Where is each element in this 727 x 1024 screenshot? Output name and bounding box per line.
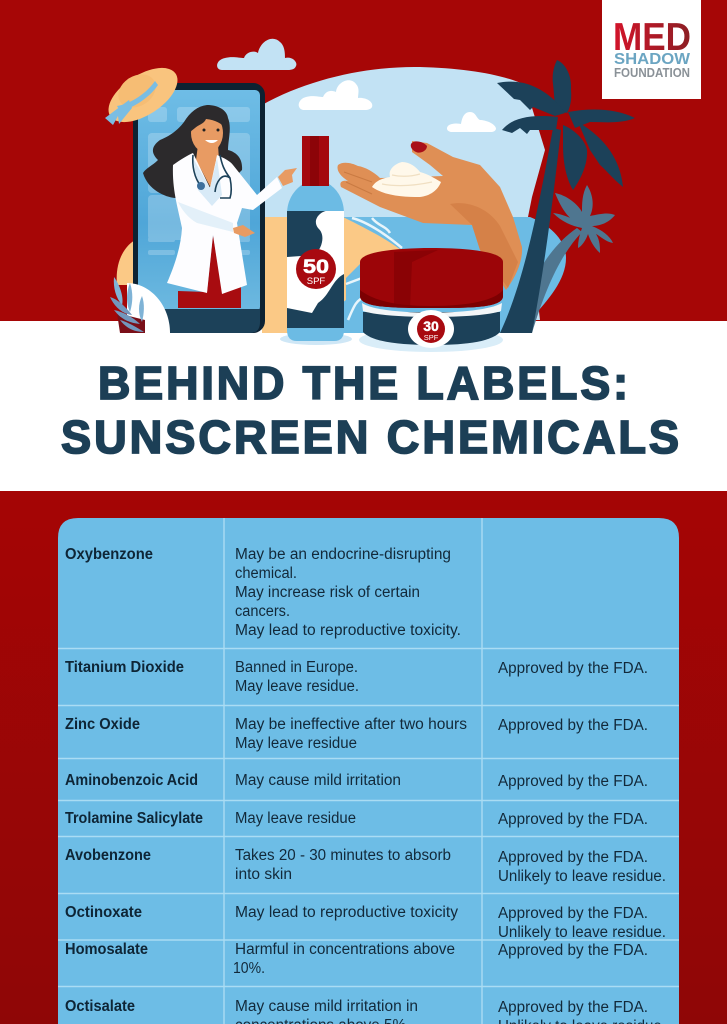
row: Trolamine Salicylate: Trolamine Salicylate (65, 810, 203, 827)
lower red background (0, 491, 727, 1024)
row: Oxybenzone: May lead to reproductive toxicity. (235, 622, 461, 639)
row: Avobenzone (65, 847, 666, 885)
stethoscope (193, 155, 231, 198)
cream dollop (372, 162, 441, 197)
logo: MedShadow Foundation: FOUNDATION (614, 66, 690, 80)
row: Titanium Dioxide: May leave residue. (235, 678, 359, 695)
row: Octisalate: Octisalate (65, 998, 135, 1015)
row: Homosalate (65, 941, 648, 977)
cream jar (359, 248, 503, 352)
sand (262, 217, 401, 333)
row: Titanium Dioxide: Approved by the FDA. (498, 660, 648, 677)
row: Octinoxate: Octinoxate (65, 904, 142, 921)
beach illustration (99, 39, 635, 352)
row: Octinoxate: May lead to reproductive toxicity (235, 904, 458, 921)
badge: 50 SPF: SPF (307, 276, 325, 287)
foam on shore (346, 218, 402, 320)
row: Homosalate: Harmful in concentrations above (235, 941, 455, 958)
doctor hair (143, 105, 242, 198)
row: Oxybenzone: Oxybenzone (65, 546, 153, 563)
row: Homosalate: Homosalate (65, 941, 148, 958)
jar label: 30 SPF (408, 310, 454, 348)
cloud: right (447, 112, 496, 132)
logo: MedShadow Foundation (602, 0, 701, 99)
row: Oxybenzone: May be an endocrine-disrupting (235, 546, 451, 563)
row: Oxybenzone (65, 546, 461, 639)
row: Zinc Oxide: Approved by the FDA. (498, 717, 648, 734)
row: Titanium Dioxide (65, 659, 648, 695)
chemicals table (58, 518, 679, 1024)
title: SUNSCREEN CHEMICALS (61, 411, 682, 463)
sky backdrop (262, 67, 545, 320)
row: Avobenzone: Avobenzone (65, 847, 151, 864)
doctor skirt (178, 235, 241, 308)
phone (133, 83, 265, 333)
row: Trolamine Salicylate: May leave residue (235, 810, 356, 827)
doctor hands (278, 168, 297, 186)
title (61, 357, 682, 463)
straw hat (99, 57, 187, 133)
phone app tiles (148, 107, 250, 255)
white title band (0, 321, 727, 491)
sea (262, 217, 566, 333)
doctor neck and face (196, 145, 219, 190)
row: Oxybenzone: May increase risk of certain (235, 584, 420, 601)
row: Oxybenzone: cancers. (235, 603, 290, 620)
logo: MedShadow Foundation: MED (613, 16, 691, 59)
plant with white mound (110, 277, 170, 333)
doctor coat (167, 153, 282, 294)
row: Aminobenzoic Acid: Aminobenzoic Acid (65, 772, 198, 789)
jar label: 30 SPF: SPF (424, 333, 439, 342)
badge: 50 SPF: 50 (303, 257, 329, 278)
row: Zinc Oxide: May leave residue (235, 735, 357, 752)
hand with cream (337, 141, 522, 290)
sunscreen bottle (280, 136, 352, 345)
sand circle behind phone (117, 240, 135, 285)
jar label: 30 SPF: 30 (423, 318, 439, 334)
row: Octinoxate: Approved by the FDA. (498, 905, 648, 922)
row: Titanium Dioxide: Banned in Europe. (235, 659, 358, 676)
row: Octisalate (65, 998, 666, 1024)
thumb nail (411, 141, 427, 153)
palm tree: large (497, 60, 635, 333)
row: Avobenzone: Unlikely to leave residue. (498, 868, 666, 885)
table background (58, 518, 679, 1024)
title: BEHIND THE LABELS: (98, 357, 631, 409)
table grid (58, 518, 679, 1024)
header background (0, 0, 727, 322)
row: Zinc Oxide: Zinc Oxide (65, 716, 140, 733)
row: Avobenzone: Approved by the FDA. (498, 849, 648, 866)
row: Avobenzone: Takes 20 - 30 minutes to absorb (235, 847, 451, 864)
doctor (143, 105, 297, 308)
palm tree: small (517, 185, 615, 333)
cloud: middle (299, 80, 372, 110)
logo: MedShadow Foundation: SHADOW (614, 51, 691, 68)
row: Zinc Oxide: May be ineffective after two hours (235, 716, 467, 733)
row: Octisalate: May cause mild irritation in (235, 998, 418, 1015)
badge: 50 SPF (296, 249, 336, 289)
row: Titanium Dioxide: Titanium Dioxide (65, 659, 184, 676)
row: Homosalate: 10%. (233, 960, 265, 977)
row: Octinoxate: Unlikely to leave residue. (498, 924, 666, 941)
row: Oxybenzone: chemical. (235, 565, 297, 582)
row: Octisalate: Approved by the FDA. (498, 999, 648, 1016)
row: Trolamine Salicylate: Approved by the FDA. (498, 811, 648, 828)
cloud: top (217, 39, 296, 70)
row: Octinoxate (65, 904, 666, 941)
row: Zinc Oxide (65, 716, 648, 752)
row: Trolamine Salicylate (65, 810, 648, 828)
row: Avobenzone: into skin (235, 866, 292, 883)
row: Aminobenzoic Acid (65, 772, 648, 790)
row: Homosalate: Approved by the FDA. (498, 942, 648, 959)
row: Aminobenzoic Acid: May cause mild irritation (235, 772, 401, 789)
row: Aminobenzoic Acid: Approved by the FDA. (498, 773, 648, 790)
